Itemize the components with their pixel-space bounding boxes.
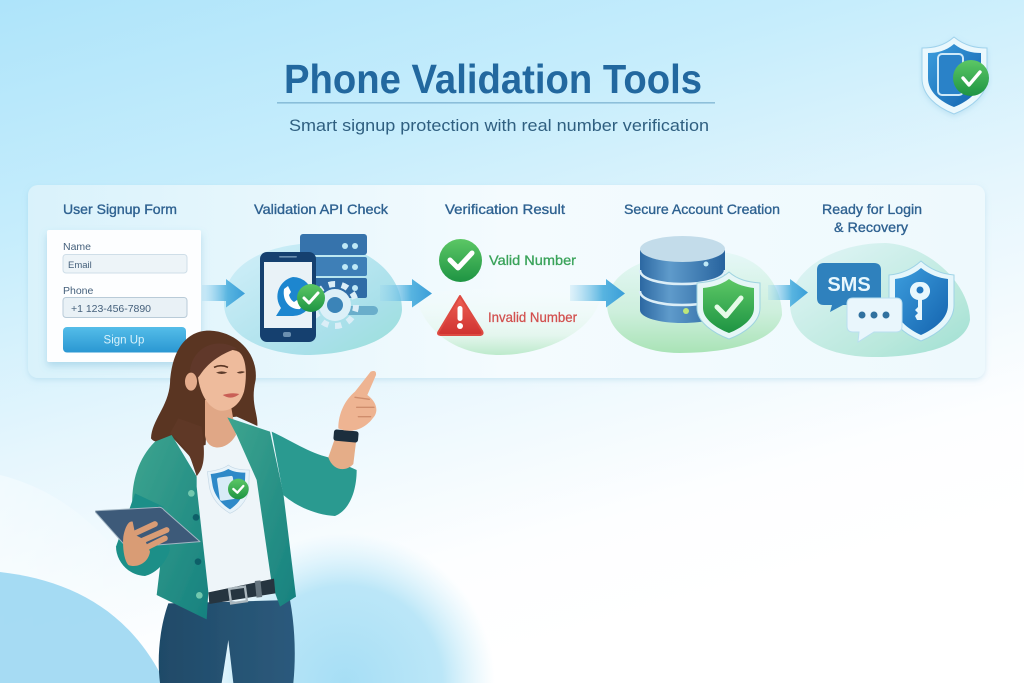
arrow 3	[570, 279, 625, 308]
panel: signup flow	[28, 185, 985, 378]
t-shirt	[197, 435, 272, 592]
valid icon	[439, 239, 482, 282]
person presenting with tablet	[95, 331, 376, 683]
hair back	[151, 331, 257, 476]
step 2 heading: Validation API Check	[254, 201, 389, 217]
forearm	[328, 433, 357, 469]
right jacket panel	[227, 417, 296, 607]
watch	[333, 429, 359, 443]
key	[910, 282, 930, 320]
facial features	[214, 366, 245, 398]
step 3 heading: Verification Result	[445, 201, 565, 217]
sms bubble: SMS	[827, 274, 871, 296]
signup form card	[47, 230, 201, 362]
verification result	[415, 239, 600, 355]
shirt shield logo	[207, 465, 249, 513]
name label: Name	[63, 241, 91, 253]
step 1 heading: User Signup Form	[63, 201, 177, 217]
sign up button: Sign Up	[104, 334, 144, 346]
chat phone icon	[276, 277, 313, 316]
step 5 heading line 2: & Recovery	[834, 219, 908, 235]
email field: Email	[68, 260, 92, 271]
hair strand over jacket	[170, 418, 204, 476]
secure account creation	[607, 236, 782, 353]
face	[197, 349, 246, 411]
connector bar	[345, 306, 378, 315]
phone	[260, 252, 316, 342]
left jacket panel	[132, 435, 208, 619]
icon: shield with phone and check	[922, 37, 989, 114]
database	[640, 236, 725, 323]
server stack	[300, 234, 367, 298]
pointing hand	[338, 371, 376, 431]
belt	[208, 579, 275, 604]
hair fringe	[190, 343, 237, 380]
invalid icon	[438, 296, 483, 335]
step 4 heading: Secure Account Creation	[624, 201, 780, 217]
valid number label: Valid Number	[489, 252, 576, 268]
phone label: Phone	[63, 285, 94, 297]
tablet	[95, 507, 200, 547]
hand holding tablet	[123, 521, 167, 566]
step 5 heading: Ready for Login	[822, 201, 922, 217]
login and recovery	[790, 243, 970, 357]
background wave shapes	[0, 475, 495, 683]
subtitle: Smart signup protection with real number verification	[289, 116, 709, 135]
sms bubble	[817, 263, 881, 312]
green shield	[697, 272, 760, 339]
green check badge	[297, 284, 325, 312]
arrow 1	[202, 279, 245, 308]
ear	[185, 373, 197, 391]
jacket buttons	[188, 490, 203, 599]
neck	[205, 400, 236, 447]
phone field	[63, 298, 187, 318]
blue key shield	[889, 261, 954, 341]
gear	[314, 284, 356, 326]
phone field: +1 123-456-7890	[71, 303, 151, 315]
email field	[63, 254, 187, 273]
sign up button	[63, 327, 186, 352]
arrow 4	[768, 279, 808, 307]
left sleeve	[116, 493, 170, 576]
jeans	[159, 600, 295, 683]
title underline	[277, 102, 715, 104]
typing bubble	[847, 298, 902, 342]
right sleeve	[272, 432, 357, 516]
arrow 2	[380, 279, 432, 308]
validation API illustration	[224, 234, 402, 355]
title: Phone Validation Tools	[284, 56, 702, 102]
invalid number label: Invalid Number	[488, 309, 577, 325]
